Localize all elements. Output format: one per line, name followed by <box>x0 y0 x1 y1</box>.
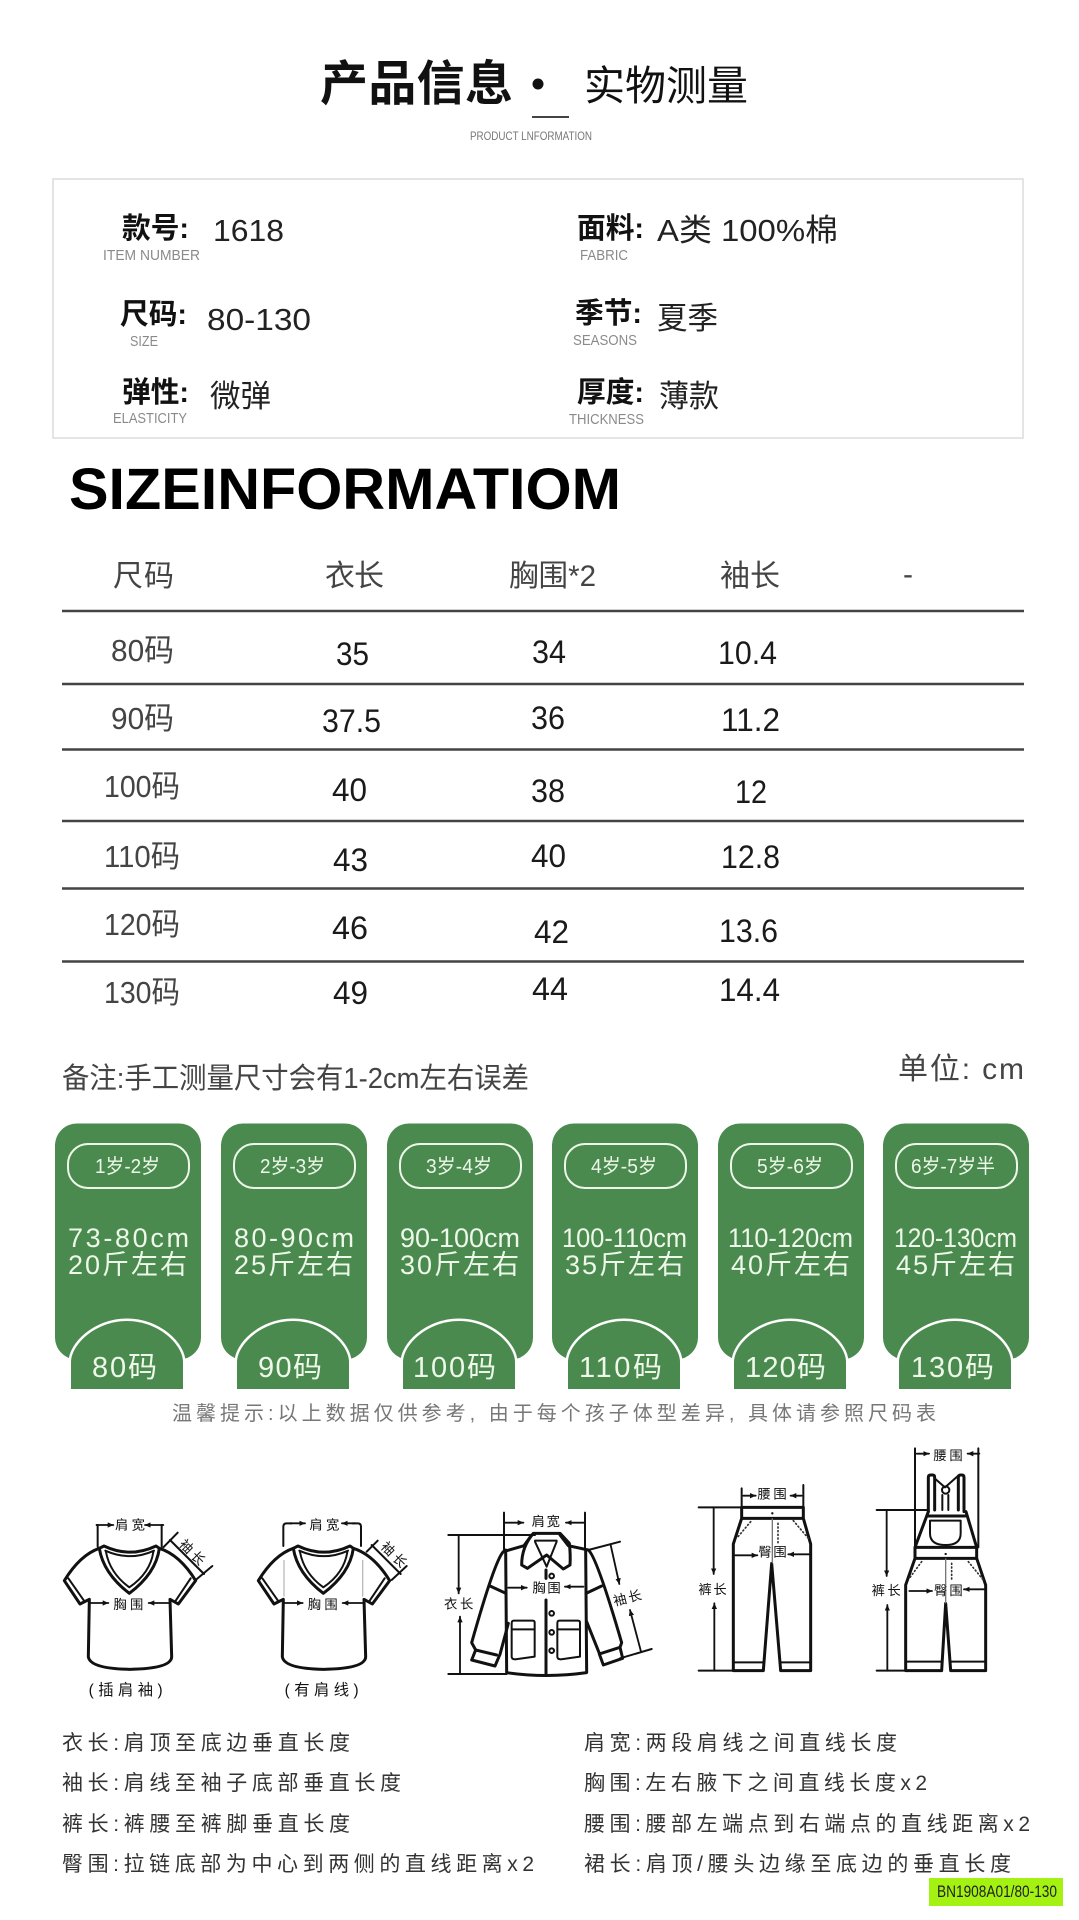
item number <box>103 212 284 264</box>
table header: 胸围*2 <box>509 560 596 593</box>
title underline <box>532 116 569 118</box>
card: 80码 <box>55 1124 201 1389</box>
definitions: left column: 臀围:拉链底部为中心到两侧的直线距离x2 <box>62 1853 534 1876</box>
card: 120码: 120码 <box>745 1352 826 1384</box>
card: 90码: 25斤左右 <box>234 1250 353 1280</box>
title: bold heading: 产品信息 <box>320 58 513 111</box>
icon: jacket: 胸围 <box>532 1581 561 1596</box>
note: unit: 单位: cm <box>898 1053 1024 1086</box>
row: 120码: 46 <box>332 910 368 946</box>
row: 80码: 35 <box>336 636 369 672</box>
row: 100码 <box>104 769 767 810</box>
icon: jacket <box>444 1513 652 1675</box>
icon: t-shirt with shoulder seam: 胸围 <box>308 1597 338 1612</box>
panel border <box>53 179 1023 438</box>
season: 夏季 <box>657 301 718 336</box>
row: 120码: 42 <box>534 914 569 950</box>
icon: trousers: 腰围 <box>757 1486 787 1501</box>
row: 110码: 40 <box>531 838 566 874</box>
size: SIZE <box>130 333 158 350</box>
icon: t-shirt with shoulder seam: 肩宽 <box>309 1516 339 1532</box>
row: 100码: 100码 <box>104 769 180 804</box>
size: 80-130 <box>207 302 311 337</box>
row: 110码: 12.8 <box>721 839 780 875</box>
measurement definitions <box>62 1732 1030 1876</box>
row: 130码: 130码 <box>104 975 180 1010</box>
table header: - <box>903 558 913 591</box>
row: 90码: 36 <box>531 700 565 736</box>
card: 80码: 1岁-2岁 <box>95 1155 160 1178</box>
icon: overalls <box>872 1448 986 1671</box>
row: 130码: 14.4 <box>719 972 780 1008</box>
season: SEASONS <box>573 332 637 349</box>
card: 80码: 80码 <box>92 1352 157 1384</box>
icon: overalls: 腰围 <box>933 1448 963 1463</box>
size table <box>62 558 1024 1011</box>
fabric: A类 100%棉 <box>657 213 838 248</box>
table header <box>113 558 913 593</box>
card: 110码: 35斤左右 <box>565 1250 684 1280</box>
row: 90码: 90码 <box>111 701 174 736</box>
definitions: left column: 裤长:裤腰至裤脚垂直长度 <box>62 1813 350 1836</box>
thickness: 厚度: <box>577 376 644 409</box>
title dot <box>532 78 544 90</box>
row: 100码: 40 <box>332 772 367 808</box>
note: measurement error: 备注:手工测量尺寸会有1-2cm左右误差 <box>62 1062 529 1095</box>
icon: t-shirt with shoulder seam <box>258 1516 410 1699</box>
card: 110码: 110码 <box>579 1352 662 1384</box>
fabric: 面料: <box>577 212 644 245</box>
card: 110码: 4岁-5岁 <box>591 1155 657 1178</box>
card: 100码: 100码 <box>413 1352 496 1384</box>
card: 130码 <box>883 1124 1029 1389</box>
row: 120码: 13.6 <box>719 913 778 949</box>
row: 130码 <box>104 971 780 1011</box>
card: 120码: 5岁-6岁 <box>757 1155 823 1178</box>
elasticity: 弹性: <box>122 376 189 409</box>
card: 100码: 30斤左右 <box>400 1250 519 1280</box>
row: 110码: 43 <box>333 842 368 878</box>
card: 80码: 73-80cm <box>68 1223 189 1253</box>
row: 110码: 110码 <box>104 839 180 874</box>
item number: 款号: <box>122 212 189 245</box>
icon: t-shirt raglan sleeve: (插肩袖) <box>89 1682 163 1699</box>
row: 110码 <box>104 838 780 878</box>
row: 130码: 49 <box>333 975 368 1011</box>
card: 130码: 45斤左右 <box>896 1250 1015 1280</box>
elasticity: ELASTICITY <box>113 410 187 427</box>
card: 130码: 6岁-7岁半 <box>911 1155 995 1178</box>
icon: jacket: 肩宽 <box>532 1513 560 1529</box>
definitions: left column <box>62 1732 534 1876</box>
card: 90码: 2岁-3岁 <box>260 1155 325 1178</box>
icon: jacket: 衣长 <box>444 1596 473 1611</box>
season: 季节: <box>575 297 642 330</box>
season <box>573 297 718 349</box>
icon: trousers: 裤长 <box>698 1582 727 1597</box>
thickness: 薄款 <box>659 379 719 414</box>
title: english subtitle: PRODUCT LNFORMATION <box>470 129 592 143</box>
row: 80码: 80码 <box>111 633 174 668</box>
row: 90码: 11.2 <box>721 702 780 738</box>
definitions: right column: 裙长:肩顶/腰头边缘至底边的垂直长度 <box>584 1853 1011 1876</box>
fabric: FABRIC <box>580 247 628 264</box>
item number: ITEM NUMBER <box>103 247 200 264</box>
definitions: right column: 腰围:腰部左端点到右端点的直线距离x2 <box>584 1813 1030 1836</box>
card: 100码: 3岁-4岁 <box>426 1155 492 1178</box>
card: 120码: 110-120cm <box>728 1223 853 1253</box>
icon: jacket: 袖长 <box>612 1587 643 1609</box>
thickness: THICKNESS <box>569 411 644 428</box>
row: 100码: 38 <box>531 773 565 809</box>
badge: product code <box>929 1878 1063 1906</box>
card: 120码 <box>718 1124 864 1389</box>
card: 100码: 90-100cm <box>400 1223 520 1253</box>
row: 100码: 12 <box>735 774 767 810</box>
title: light heading: 实物测量 <box>584 63 748 109</box>
definitions: left column: 袖长:肩线至袖子底部垂直长度 <box>62 1772 401 1795</box>
size <box>120 299 311 350</box>
panel: product attributes <box>53 179 1023 438</box>
card: 100码 <box>387 1124 533 1389</box>
card: 120码: 40斤左右 <box>731 1250 850 1280</box>
table header: 尺码 <box>113 560 174 593</box>
card: 80码: 20斤左右 <box>68 1250 187 1280</box>
card: 90码: 90码 <box>258 1352 322 1384</box>
age and size cards <box>55 1124 1029 1389</box>
icon: trousers: 臀围 <box>758 1545 787 1560</box>
row: 80码 <box>111 633 777 672</box>
definitions: right column: 胸围:左右腋下之间直线长度x2 <box>584 1772 927 1795</box>
definitions: right column: 肩宽:两段肩线之间直线长度 <box>584 1732 897 1755</box>
row: 120码 <box>104 907 778 950</box>
row: 80码: 34 <box>532 634 566 670</box>
elasticity: 微弹 <box>210 379 271 414</box>
heading: size information: SIZEINFORMATIOM <box>69 457 621 522</box>
row: 80码: 10.4 <box>718 635 777 671</box>
row: 130码: 44 <box>532 971 568 1007</box>
row: 90码 <box>111 700 780 739</box>
icon: t-shirt raglan sleeve: 胸围 <box>113 1597 143 1612</box>
size: 尺码: <box>120 299 187 331</box>
card: 90码: 80-90cm <box>234 1223 354 1253</box>
icon: overalls: 裤长 <box>872 1583 901 1598</box>
fabric <box>577 212 838 264</box>
icon: t-shirt raglan sleeve: 肩宽 <box>115 1516 145 1532</box>
item number: 1618 <box>213 213 284 248</box>
tip text: 温馨提示:以上数据仅供参考, 由于每个孩子体型差异, 具体请参照尺码表 <box>172 1402 936 1425</box>
icon: t-shirt raglan sleeve: 袖长 <box>176 1537 208 1568</box>
card: 110码 <box>552 1124 698 1389</box>
icon: overalls: 臀围 <box>934 1583 963 1598</box>
card: 90码 <box>221 1124 367 1389</box>
definitions: left column: 衣长:肩顶至底边垂直长度 <box>62 1732 350 1755</box>
elasticity <box>113 376 271 427</box>
icon: trousers <box>698 1485 811 1671</box>
icon: t-shirt with shoulder seam: (有肩线) <box>285 1682 359 1699</box>
row: 90码: 37.5 <box>322 703 381 739</box>
definitions: right column <box>584 1732 1030 1876</box>
icon: t-shirt raglan sleeve <box>64 1516 212 1699</box>
card: 110码: 100-110cm <box>562 1223 687 1253</box>
table header: 袖长 <box>720 560 780 593</box>
card: 130码: 120-130cm <box>894 1223 1017 1253</box>
title block <box>320 58 748 143</box>
table header: 衣长 <box>325 560 384 593</box>
row: 120码: 120码 <box>104 907 180 942</box>
card: 130码: 130码 <box>911 1352 994 1384</box>
thickness <box>569 376 719 428</box>
icon: t-shirt with shoulder seam: 袖长 <box>378 1539 410 1571</box>
